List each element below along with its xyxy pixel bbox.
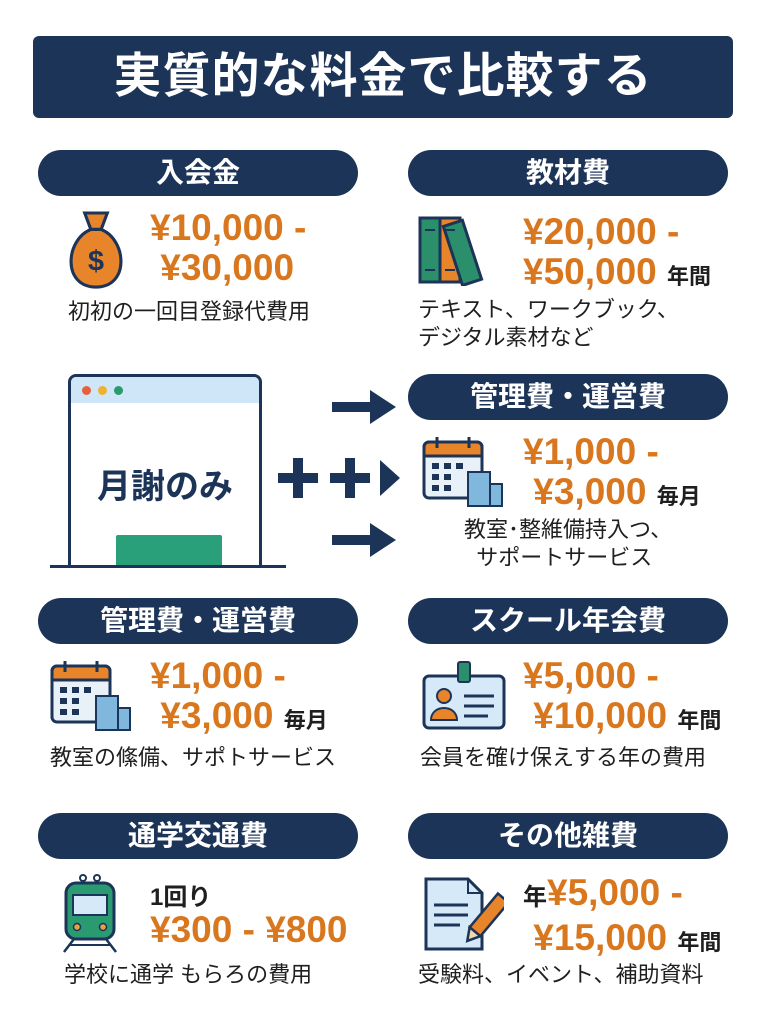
price: ¥3,000 毎月 [533,471,701,512]
heading: 通学交通費 [128,820,268,851]
heading: その他雑費 [498,820,638,851]
price: ¥5,000 - [523,655,659,696]
price [523,431,701,512]
panel: school annual fee [408,598,728,770]
description: デジタル素材など [418,325,594,350]
price: 年¥5,000 - [523,872,683,913]
panel: management fee (right) [408,374,728,570]
heading: 管理費・運営費 [100,605,296,636]
price [523,655,721,736]
heading: entrance fee: 入会金 [156,157,240,188]
description: 受験料、イベント、補助資料 [418,962,704,987]
price [150,207,306,288]
panel: entrance fee [38,150,358,324]
icon: document pencil [424,878,504,950]
heading: スクール年会費 [470,605,666,636]
icon: calendar building [422,437,503,507]
icon: money bag [70,212,122,289]
heading: entrance fee [38,150,358,196]
price: ¥15,000 年間 [533,917,721,958]
arrows: plus and arrows [278,390,400,557]
price: ¥10,000 - [150,207,306,248]
icon: train [63,874,117,953]
description [464,517,672,570]
icon: calendar building [50,661,131,731]
price [150,655,328,736]
illustration: monthly fee only window [50,374,286,568]
price: ¥50,000 年間 [523,251,711,292]
description: 学校に通学 もらろの費用 [64,962,312,987]
label: monthly fee only: 月謝のみ [97,468,233,506]
price: ¥1,000 - [523,431,659,472]
title: 実質的な料金で比較する [113,50,652,103]
description: 会員を確け保えする年の費用 [420,745,706,770]
panel: misc [408,813,728,987]
price [523,872,721,958]
heading [38,598,358,644]
description: 教室の絛備、サポトサービス [50,745,336,770]
price: ¥1,000 - [150,655,286,696]
icon: books [418,216,484,286]
icon: money bag: $ [88,246,104,278]
price: ¥20,000 - [523,211,679,252]
heading: materials: 教材費 [526,157,610,188]
price: ¥10,000 年間 [533,695,721,736]
price: ¥300 - ¥800 [150,909,348,950]
price: ¥3,000 毎月 [160,695,328,736]
heading [38,813,358,859]
price [523,211,711,292]
heading: materials [408,150,728,196]
heading: 管理費・運営費 [470,381,666,412]
heading [408,813,728,859]
label: per trip: 1回り [150,884,211,911]
description: テキスト、ワークブック、 [418,297,679,322]
icon: ID card [422,661,506,730]
description: 初初の一回目登録代費用 [68,299,310,324]
heading [408,374,728,420]
title [33,36,733,118]
panel: management fee (left) [38,598,358,770]
panel: commuting [38,813,358,987]
description: 教室･整維備持入つ、 [464,517,672,542]
price: ¥30,000 [160,247,294,288]
description [418,297,679,350]
panel: materials [408,150,728,350]
description: サポートサービス [476,545,652,570]
heading [408,598,728,644]
